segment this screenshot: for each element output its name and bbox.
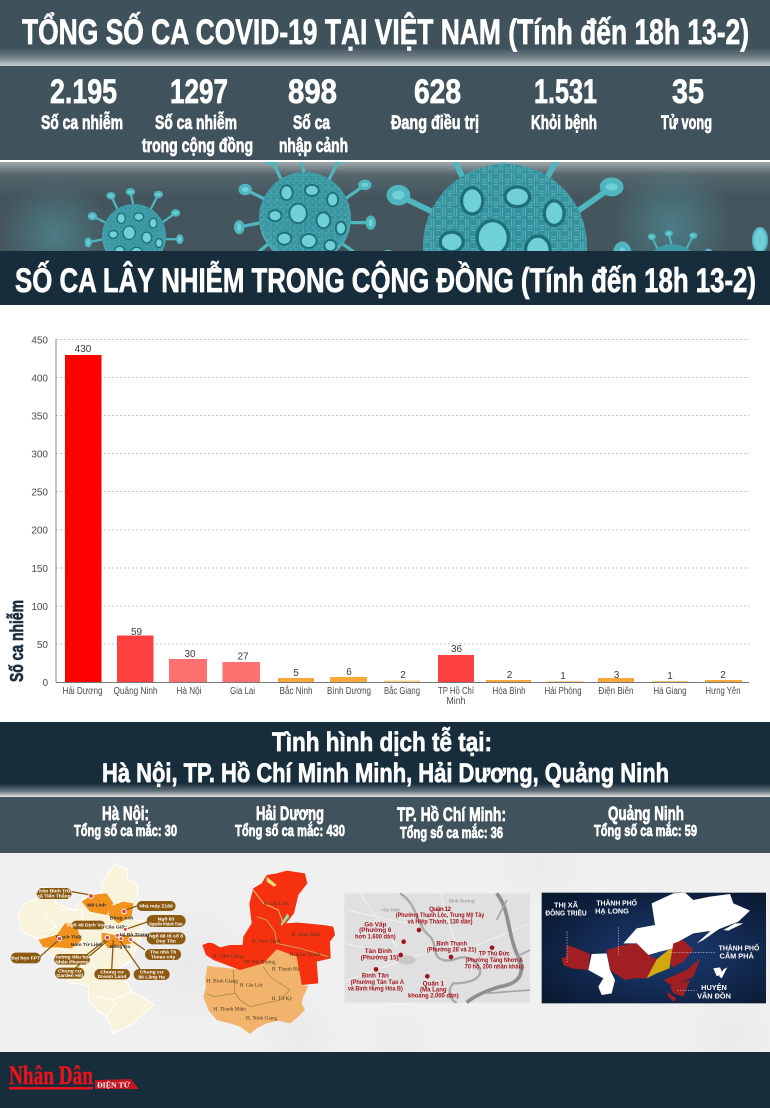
y axis tick labels: 400 [31, 374, 48, 384]
stat: imported: nhập cảnh [279, 136, 348, 157]
stat: infected: 2.195 [50, 73, 117, 111]
total: Quảng Ninh [594, 804, 697, 840]
map: Quảng Ninh: THÀNH PHỐ [719, 943, 760, 953]
map: Hà Nội: Duy Tân [156, 938, 176, 944]
total: Hải Dương [235, 804, 345, 840]
value labels: 30 [184, 649, 196, 660]
map: Quảng Ninh: THÀNH PHỐ [596, 898, 637, 908]
total: TP. Hồ Chí Minh [397, 805, 506, 842]
map: TP. Hồ Chí Minh: Gò Vấp [364, 921, 387, 929]
total: Hà Nội [74, 804, 177, 840]
map: Hải Dương: H. Bình Giang [207, 978, 238, 984]
y axis tick labels: 450 [31, 336, 48, 346]
map: Hải Dương: H. Thanh Miện [213, 1007, 246, 1013]
stat: recovered [531, 73, 597, 134]
map: TP. Hồ Chí Minh: Bình Tân [362, 973, 389, 980]
map: Hà Nội [11, 864, 186, 1033]
stat: imported: Số ca [293, 113, 330, 134]
map: TP. Hồ Chí Minh: TP Thủ Đức [479, 950, 510, 957]
map: Hà Nội: Chung cư [100, 969, 124, 975]
total: Quảng Ninh: Quảng Ninh [608, 804, 684, 825]
category labels: Hà Nội [176, 686, 202, 697]
category labels: Hà Giang [654, 686, 686, 697]
map: Hà Nội: Times city [151, 954, 175, 960]
value labels: 2 [507, 670, 513, 681]
map: Quảng Ninh: CẨM PHẢ [720, 952, 754, 961]
category labels: Bình Dương [327, 686, 371, 697]
total: Hải Dương: Tổng số ca mắc: 430 [235, 821, 345, 840]
map: TP. Hồ Chí Minh: khoảng 2.000 dân) [408, 993, 459, 1000]
map: Hà Nội: Ngõ 88 tổ số 8 [149, 932, 183, 939]
y axis tick labels: 100 [31, 602, 48, 613]
value labels: 1 [560, 671, 566, 682]
panel: national statistics [0, 66, 770, 160]
y axis tick labels: 300 [31, 450, 48, 460]
header band: total cases [0, 0, 770, 66]
total: Hải Dương: Hải Dương [256, 804, 324, 825]
map: TP. Hồ Chí Minh: Hóc Môn [381, 907, 400, 912]
stat: imported: 898 [288, 73, 337, 111]
map: TP. Hồ Chí Minh: hơn 1.600 dân) [355, 933, 396, 940]
y axis title: Số ca nhiễm [6, 600, 27, 682]
map: Hà Nội: Garden Hill [56, 973, 84, 979]
stat: imported [279, 73, 348, 157]
map: Hải Dương: H. Thanh Hà [272, 967, 300, 973]
map: Hải Dương: H. Chí Linh [263, 901, 289, 907]
map: TP. Hồ Chí Minh: (Phường Thạnh Lộc, Trung Mỹ Tây [396, 912, 485, 919]
stat: recovered: Khỏi bệnh [531, 113, 597, 134]
stat: community infected: Số ca nhiễm [155, 112, 237, 134]
total: Hà Nội: Tổng số ca mắc: 30 [74, 821, 177, 840]
y axis tick labels [31, 336, 48, 689]
map: Hải Dương: H. Ninh Giang [246, 1016, 278, 1022]
map: Hải Dương: H. Gia Lộc [239, 983, 264, 989]
map: TP. Hồ Chí Minh: 70 hộ, 200 nhân khẩu) [465, 962, 524, 970]
value labels [75, 344, 726, 682]
map: TP. Hồ Chí Minh: (Phường Tân Tạo A [351, 979, 404, 986]
map: TP. Hồ Chí Minh: Bình Thạnh [436, 941, 467, 948]
map: Hà Nội: Đại học FPT [11, 956, 40, 962]
map: TP. Hồ Chí Minh: (Phường Tăng Nhơn A [466, 957, 523, 964]
heading line 1: Tình hình dịch tễ tại: [272, 726, 492, 757]
map: Hà Nội: Dream Land [98, 974, 126, 980]
value labels: 5 [293, 668, 299, 679]
map: Hải Dương: H. Tứ Kỳ [272, 996, 292, 1002]
map: Hà Nội: Mê Linh [87, 903, 106, 909]
map: Hà Nội: Chung cư [58, 968, 82, 974]
map: Hải Dương: H. Nam Sách [252, 938, 281, 944]
map: TP. Hồ Chí Minh: Quận 12 [429, 906, 451, 913]
category labels: Minh [446, 696, 466, 707]
value labels: 59 [131, 627, 142, 638]
map: Hà Nội: Ngõ 83 [158, 916, 175, 922]
heading band: epidemic situation [0, 722, 770, 797]
stat: recovered: 1.531 [534, 73, 597, 111]
map: Hải Dương: H. Kim Thành [289, 952, 320, 958]
map: Hà Nội: 86 Lãng Hạ [138, 974, 165, 980]
y axis tick labels: 200 [31, 526, 48, 536]
map: Hà Nội: Nhân Phương [55, 959, 89, 965]
map: Hải Dương: TP. Hải Dương [243, 959, 276, 965]
y axis tick labels: 50 [37, 640, 48, 651]
y axis tick labels: 150 [31, 564, 48, 575]
category labels: Hưng Yên [706, 686, 740, 697]
total: Hà Nội: Hà Nội: [102, 804, 149, 825]
map: Hà Nội: Đông Anh [110, 915, 133, 921]
bars [65, 355, 742, 682]
map: TP. Hồ Chí Minh: và Hiệp Thành, 130 dân) [407, 918, 472, 925]
map: Quảng Ninh: THỊ XÃ [554, 900, 579, 909]
total: Quảng Ninh: Tổng số ca mắc: 59 [594, 821, 697, 840]
map: Hải Dương [202, 871, 335, 1034]
value labels: 3 [614, 670, 620, 681]
value labels: 2 [720, 670, 726, 681]
y axis tick labels: 0 [42, 678, 48, 689]
category labels: Hải Dương [62, 686, 102, 697]
value labels: 36 [451, 644, 462, 655]
map: TP. Hồ Chí Minh: và Bình Hưng Hòa B) [348, 985, 403, 992]
category labels: Quảng Ninh [114, 686, 158, 697]
map: TP. Hồ Chí Minh: (Phường 15) [361, 954, 399, 961]
stat: under treatment: 628 [414, 73, 461, 111]
map: Hà Nội: Nhà máy Z168 [139, 904, 173, 910]
panel: maps background [0, 853, 770, 1052]
map: TP. Hồ Chí Minh: (Phường 28 và 21) [427, 947, 476, 954]
value labels: 27 [237, 652, 249, 662]
stat: community infected [142, 73, 253, 157]
map: Hà Nội: Đống Đa [110, 943, 130, 950]
map: Quảng Ninh: VÂN ĐỒN [697, 990, 731, 1000]
stat: infected: Số ca nhiễm [41, 112, 123, 134]
map: Hà Nội: Trường tiểu học [53, 954, 91, 961]
category labels: Bắc Giang [384, 684, 420, 697]
map: Hà Nội: Ngõ 49 Dịch Vọng [67, 923, 110, 929]
map: TP. Hồ Chí Minh: Quận 1 [423, 980, 445, 987]
logo: Nhân Dân điện tử: Nhân Dân [9, 1061, 93, 1090]
map: TP. Hồ Chí Minh: Bình Dương [449, 899, 475, 904]
panel: locality totals [0, 797, 770, 853]
stat: deaths: 35 [672, 73, 704, 111]
category labels: Hải Phòng [544, 686, 582, 697]
stat: under treatment: Đang điều trị [391, 113, 479, 134]
map: Quảng Ninh: HUYỆN [701, 983, 727, 992]
bar chart: community cases by province [0, 305, 770, 722]
map: Hải Dương: H. Cẩm Giàng [213, 952, 244, 959]
stat: under treatment [391, 73, 479, 134]
category labels: Gia Lai [230, 686, 255, 697]
map: Hà Nội: Hai Bà Trưng [118, 932, 149, 938]
y axis tick labels: 250 [31, 488, 48, 498]
map: Hải Dương: H. Kinh Môn [292, 932, 321, 938]
stat: infected [41, 73, 123, 134]
total: TP. Hồ Chí Minh: Tổng số ca mắc: 36 [400, 823, 503, 842]
map: Hà Nội: Tòa nhà T6 [150, 950, 176, 956]
map: Hà Nội: xã Tiến Thắng [37, 892, 71, 899]
logo: Nhân Dân điện tử: ĐIỆN TỬ [97, 1080, 130, 1090]
value labels: 2 [400, 670, 406, 681]
category labels: Điện Biên [598, 686, 634, 697]
map: Quảng Ninh [542, 893, 766, 1003]
heading band: community cases [0, 251, 770, 305]
map: Hà Nội: Thôn Đình Trữ, [36, 889, 72, 895]
value labels: 6 [346, 667, 352, 678]
map: TP. Hồ Chí Minh: (Mả Lạng [420, 987, 447, 994]
category labels: Hòa Bình [492, 686, 526, 697]
stat: deaths [661, 73, 712, 134]
map: Quảng Ninh: ĐÔNG TRIỀU [545, 907, 587, 917]
map: Hà Nội: Nam Từ Liêm [71, 942, 103, 948]
map: Hà Nội: Thạch Thất [55, 933, 82, 940]
category labels: TP Hồ Chí [438, 685, 474, 697]
map: Quảng Ninh: HẠ LONG [595, 906, 629, 915]
total: TP. Hồ Chí Minh: TP. Hồ Chí Minh: [397, 805, 506, 826]
map: TP. Hồ Chí Minh: Tân Bình [365, 948, 392, 955]
stat: community infected: 1297 [170, 73, 228, 111]
stat: community infected: trong cộng đồng [142, 136, 253, 157]
category labels: Bắc Ninh [280, 684, 312, 697]
value labels: 1 [667, 671, 673, 682]
stat: deaths: Tử vong [661, 113, 712, 134]
map: Hà Nội: Nguyễn Khánh Toàn [149, 920, 183, 927]
map: Hà Nội: Cầu Giấy [105, 923, 127, 930]
category labels [62, 684, 740, 707]
map: TP. Hồ Chí Minh: (Phường 6 [359, 927, 392, 934]
map: Hà Nội: Chung cư [140, 969, 164, 975]
map: TP. Hồ Chí Minh [344, 893, 530, 1003]
y axis tick labels: 350 [31, 412, 48, 422]
virus illustration band [0, 162, 770, 251]
footer band [0, 1052, 770, 1108]
value labels: 430 [75, 344, 92, 355]
